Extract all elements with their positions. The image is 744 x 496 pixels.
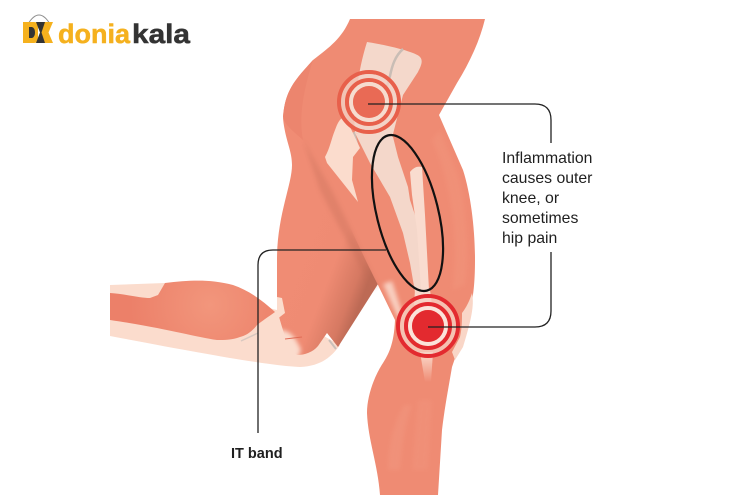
logo wordmark [58,19,191,49]
logo icon [23,22,53,43]
logo arc [28,15,50,24]
hip side shade [283,60,313,140]
knee muscle crease [285,337,302,339]
calf muscle [110,281,275,340]
lower quadriceps streak [383,281,403,318]
shin muscle highlight right [412,400,432,470]
patellar tendon upper [414,290,432,305]
anatomical leg illustration [110,19,485,495]
bent lower leg tendon base [110,283,340,367]
inflammation label: causes outer [502,170,592,187]
patellar tendon side [452,293,473,360]
front thigh highlight [432,130,467,290]
shin muscle highlight [388,405,412,470]
iliotibial band main [355,133,428,292]
logo wordmark: donia [58,19,131,49]
inflammation label: Inflammation [502,150,592,167]
IT band label: IT band [231,446,283,462]
inflammation label: sometimes [502,210,578,227]
hamstring tendon [250,297,285,339]
knee pit light fade [280,330,301,362]
inflammation label: knee, or [502,190,559,207]
lateral thigh tendon [410,167,429,290]
gluteal tendon patch [325,117,360,202]
IT band ellipse outline [358,128,457,298]
logo [23,15,191,49]
logo wordmark: kala [132,19,191,49]
leader line: IT band [258,250,386,433]
upper hip tendon groove [387,49,403,86]
rear thigh muscle [277,118,378,355]
main torso and front leg [283,19,485,495]
hip tendon sheet [354,42,422,138]
rear thigh boundary shadow [303,140,378,290]
knee pain target [398,296,458,356]
patellar tendon lower [420,352,433,382]
lower hip groove [354,132,358,148]
tendon crease [241,333,258,341]
hip pain target [339,72,399,132]
inflammation label: hip pain [502,230,557,247]
outer knee tendon crease [329,340,336,349]
leader line: inflammation [368,104,551,327]
